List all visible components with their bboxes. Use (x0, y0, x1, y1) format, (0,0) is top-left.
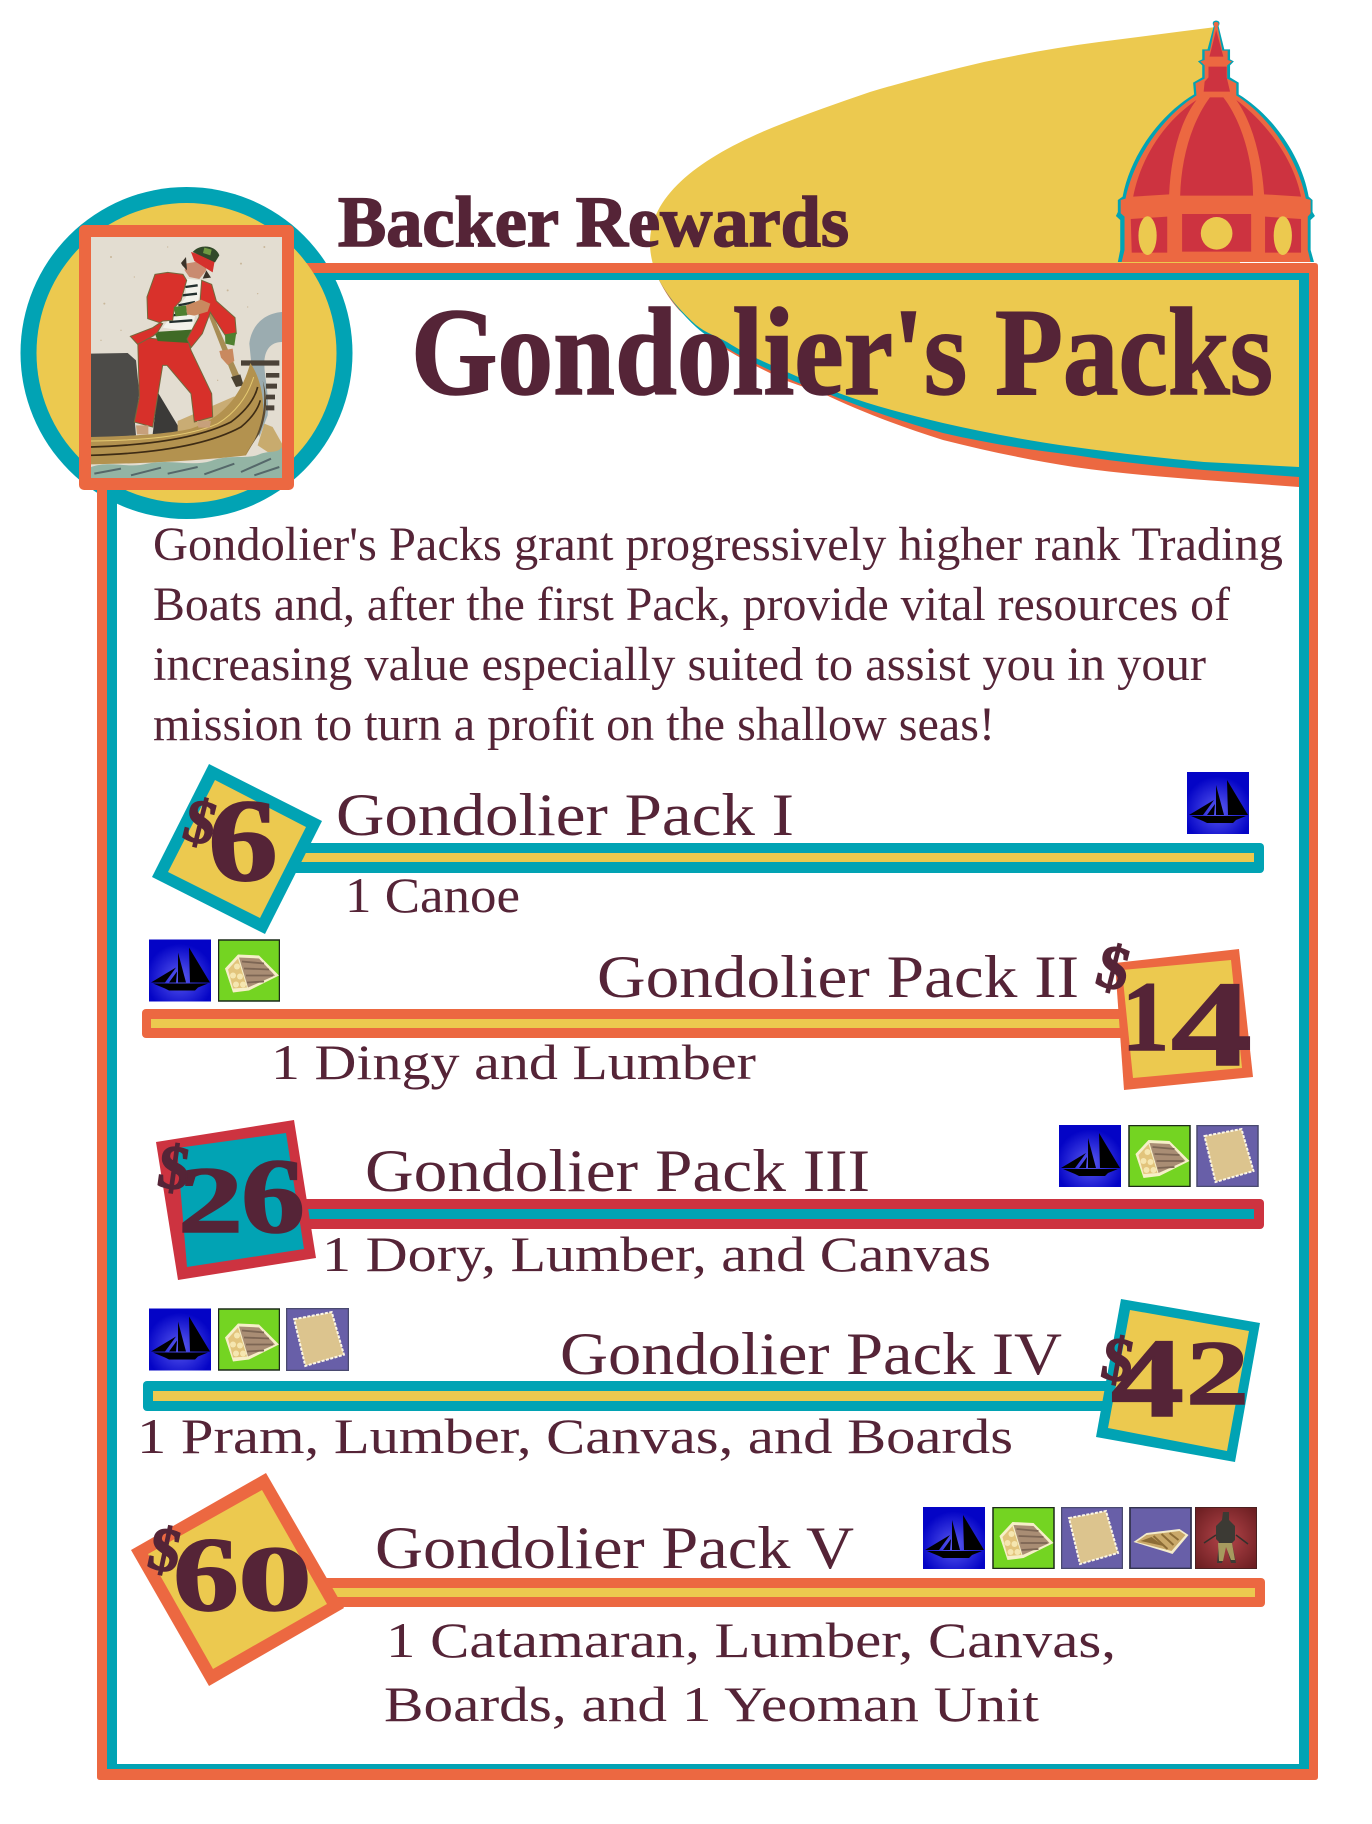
header swoosh (650, 27, 1299, 487)
pack IV: Gondolier Pack IV (560, 1321, 1062, 1387)
intro paragraph: Boats and, after the first Pack, provide vital resources of (153, 578, 1230, 631)
portrait circle fill (36, 203, 336, 503)
title: Gondolier's Packs: Gondolier's Packs (411, 284, 1273, 422)
pack III: Gondolier Pack III (365, 1138, 870, 1204)
pack III: 1 Dory, Lumber, and Canvas (322, 1226, 991, 1282)
heading: Backer Rewards: Backer Rewards (338, 182, 849, 262)
pack II: $ (1090, 931, 1137, 1005)
pack V: Gondolier Pack V (375, 1515, 854, 1581)
pack III: 6 (241, 1138, 305, 1256)
pack IV: 2 (1186, 1322, 1249, 1424)
pack V (131, 1473, 1265, 1732)
portrait: gondolier illustration (79, 225, 294, 490)
intro paragraph: mission to turn a profit on the shallow seas! (153, 698, 995, 751)
pack I: 1 Canoe (345, 867, 520, 923)
pack I (152, 764, 1264, 934)
pack IV: 1 Pram, Lumber, Canvas, and Boards (137, 1408, 1013, 1464)
pack II: 1 Dingy and Lumber (271, 1034, 756, 1090)
pack II: Gondolier Pack II (597, 944, 1079, 1010)
pack III: $ (154, 1132, 194, 1204)
pack V: 0 (238, 1528, 312, 1631)
intro paragraph: increasing value especially suited to assist you in your (153, 638, 1206, 691)
intro paragraph: Gondolier's Packs grant progressively higher rank Trading (153, 518, 1283, 571)
pack I: $ (177, 786, 224, 859)
page frame (97, 263, 1318, 1780)
icon: cathedral dome (1116, 21, 1315, 262)
pack V: Boards, and 1 Yeoman Unit (384, 1676, 1039, 1732)
pack II: 1 (1122, 961, 1169, 1072)
pack I: Gondolier Pack I (336, 782, 794, 848)
pack III: 2 (178, 1147, 243, 1253)
pack V: $ (143, 1514, 187, 1587)
intro paragraph (153, 518, 1283, 751)
pack II (142, 931, 1253, 1092)
pack IV: $ (1097, 1324, 1139, 1396)
pack IV (137, 1299, 1260, 1464)
pack III (154, 1120, 1264, 1282)
pack I: 6 (208, 775, 278, 906)
pack V: 1 Catamaran, Lumber, Canvas, (386, 1612, 1116, 1668)
pack II: 4 (1171, 957, 1252, 1092)
pack IV: 4 (1111, 1316, 1184, 1441)
portrait circle ring (20, 187, 352, 519)
pack V: 6 (173, 1516, 239, 1633)
